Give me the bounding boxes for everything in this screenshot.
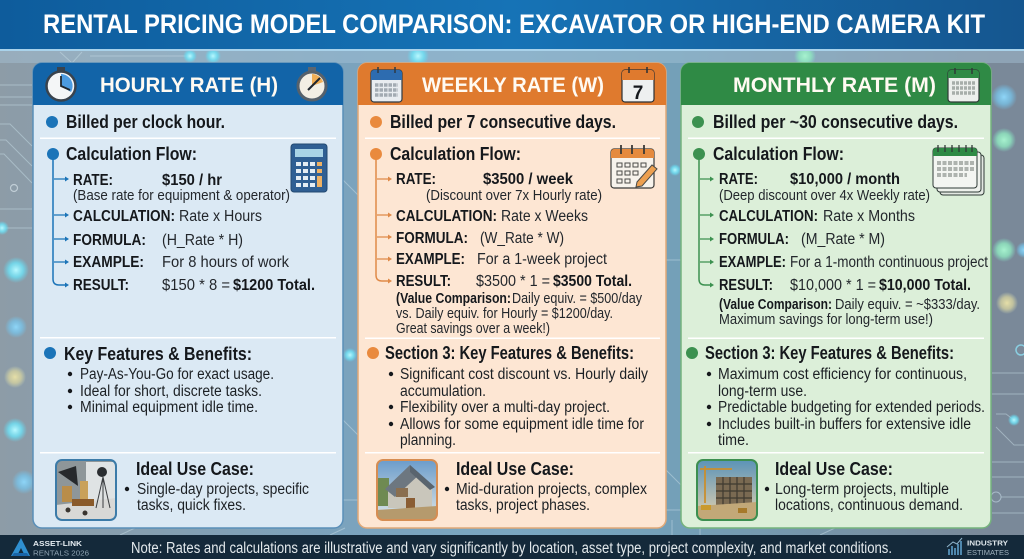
icon: calendar blue: [371, 67, 402, 102]
calculation flow: CALCULATION:: [73, 208, 175, 225]
icon: stacked calendars: [933, 145, 984, 195]
key features: Ideal for short, discrete tasks.: [80, 383, 262, 400]
logo: industry estimates: [947, 538, 1009, 557]
value comparison: [396, 291, 643, 337]
calculation flow: $150 * 8 =: [162, 277, 230, 294]
icon: calendar with pencil: [611, 145, 657, 188]
calculation flow: (Discount over 7x Hourly rate): [426, 188, 602, 204]
logo: asset-link: RENTALS 2026: [33, 548, 89, 558]
ideal use case: Ideal Use Case:: [456, 458, 574, 479]
ideal use case: Ideal Use Case:: [136, 458, 254, 479]
calculation flow: EXAMPLE:: [719, 254, 786, 271]
key features: Key Features & Benefits:: [64, 343, 252, 364]
calculation flow: FORMULA:: [396, 230, 468, 247]
value comparison: Daily equiv. = ~$333/day.: [835, 297, 980, 313]
calculation flow: CALCULATION:: [396, 208, 497, 225]
heading: weekly rate: WEEKLY RATE (W): [422, 73, 604, 97]
key features: [686, 342, 985, 449]
image: camera studio: [56, 460, 116, 520]
calculation flow: [693, 143, 989, 294]
calculation flow: (Deep discount over 4x Weekly rate): [719, 188, 930, 204]
ideal use case: locations, continuous demand.: [775, 497, 963, 514]
logo: industry estimates: ESTIMATES: [967, 548, 1009, 557]
key features: Minimal equipment idle time.: [80, 399, 258, 416]
icon: calendar seven: [622, 67, 654, 104]
calculation flow: $10,000 Total.: [879, 277, 971, 294]
calculation flow: EXAMPLE:: [73, 254, 144, 271]
calculation flow: For 8 hours of work: [162, 254, 289, 271]
calculation flow: (H_Rate * H): [162, 232, 243, 249]
calculation flow: (Base rate for equipment & operator): [73, 188, 290, 204]
ideal use case: [125, 458, 309, 514]
calculation flow: $1200 Total.: [233, 277, 315, 294]
panel: hourly rate: [33, 63, 343, 528]
image: construction site: [697, 460, 757, 520]
calculation flow: FORMULA:: [73, 232, 146, 249]
key features: Allows for some equipment idle time for: [400, 416, 644, 433]
key features: planning.: [400, 432, 456, 449]
key features: Predictable budgeting for extended periods.: [718, 399, 985, 416]
calculation flow: Calculation Flow:: [390, 143, 521, 164]
value comparison: vs. Daily equiv. for Hourly = $1200/day.: [396, 306, 613, 322]
calculation flow: RESULT:: [719, 277, 773, 294]
icon: calendar seven: 7: [633, 83, 643, 104]
key features: long-term use.: [718, 383, 807, 400]
ideal use case: Single-day projects, specific: [137, 481, 309, 498]
calculation flow: Rate x Weeks: [501, 208, 588, 225]
image: house renovation: [377, 460, 437, 520]
calculation flow: $3500 * 1 =: [476, 273, 550, 290]
key features: time.: [718, 432, 749, 449]
icon: stopwatch blue: [46, 67, 76, 100]
key features: Includes built-in buffers for extensive idle: [718, 416, 971, 433]
key features: Section 3: Key Features & Benefits:: [705, 342, 954, 363]
ideal use case: Mid-duration projects, complex: [456, 481, 647, 498]
key features: accumulation.: [400, 383, 486, 400]
heading: monthly rate: MONTHLY RATE (M): [733, 73, 936, 97]
heading: hourly rate: HOURLY RATE (H): [100, 73, 278, 97]
key features: [367, 342, 648, 449]
calculation flow: $150 / hr: [162, 172, 222, 189]
calculation flow: RESULT:: [396, 273, 451, 290]
title: [0, 0, 1024, 49]
icon: calendar grey: [948, 68, 979, 102]
calculation flow: Calculation Flow:: [66, 143, 197, 164]
icon: stopwatch orange: [298, 67, 326, 100]
calculation flow: CALCULATION:: [719, 208, 818, 225]
panel: weekly rate: [358, 63, 666, 528]
key features: Section 3: Key Features & Benefits:: [385, 342, 634, 363]
calculation flow: (M_Rate * M): [801, 231, 885, 248]
billing line: Billed per ~30 consecutive days.: [713, 111, 958, 132]
value comparison: (Value Comparison:: [719, 297, 832, 313]
key features: Pay-As-You-Go for exact usage.: [80, 366, 274, 383]
ideal use case: Long-term projects, multiple: [775, 481, 949, 498]
calculation flow: RATE:: [73, 172, 113, 189]
calculation flow: $3500 Total.: [553, 273, 632, 290]
key features: Significant cost discount vs. Hourly daily: [400, 366, 648, 383]
key features: Flexibility over a multi-day project.: [400, 399, 610, 416]
value comparison: Great savings over a week!): [396, 321, 550, 337]
logo: industry estimates: INDUSTRY: [967, 538, 1008, 548]
calculation flow: $10,000 / month: [790, 171, 900, 188]
panel: monthly rate: [681, 63, 991, 528]
calculation flow: Rate x Hours: [179, 208, 262, 225]
calculation flow: [370, 143, 632, 290]
calculation flow: [47, 143, 315, 294]
billing line: Billed per 7 consecutive days.: [390, 111, 616, 132]
key features: [44, 343, 274, 416]
calculation flow: $3500 / week: [483, 171, 573, 188]
calculation flow: EXAMPLE:: [396, 251, 465, 268]
icon: calculator: [291, 144, 327, 192]
calculation flow: RATE:: [396, 171, 436, 188]
calculation flow: Rate x Months: [823, 208, 915, 225]
billing line: Billed per clock hour.: [66, 111, 225, 132]
calculation flow: RESULT:: [73, 277, 129, 294]
calculation flow: Calculation Flow:: [713, 143, 844, 164]
logo: asset-link: [11, 538, 89, 558]
value comparison: (Value Comparison:: [396, 291, 511, 307]
footer: [0, 535, 1024, 559]
ideal use case: [445, 458, 647, 514]
value comparison: [719, 297, 980, 328]
key features: Maximum cost efficiency for continuous,: [718, 366, 967, 383]
ideal use case: [765, 458, 963, 514]
calculation flow: FORMULA:: [719, 231, 789, 248]
value comparison: Maximum savings for long-term use!): [719, 312, 933, 328]
calculation flow: RATE:: [719, 171, 758, 188]
ideal use case: tasks, project phases.: [456, 497, 590, 514]
ideal use case: tasks, quick fixes.: [137, 497, 246, 514]
ideal use case: Ideal Use Case:: [775, 458, 893, 479]
calculation flow: For a 1-week project: [477, 251, 608, 268]
calculation flow: $10,000 * 1 =: [790, 277, 876, 294]
footer note: Note: Rates and calculations are illustrative and vary significantly by location, asset type, project complexity, and market conditions.: [131, 540, 892, 557]
value comparison: Daily equiv. = $500/day: [512, 291, 643, 307]
calculation flow: For a 1-month continuous project: [790, 254, 989, 271]
logo: asset-link: ASSET-LINK: [33, 539, 83, 548]
calculation flow: (W_Rate * W): [480, 230, 564, 247]
